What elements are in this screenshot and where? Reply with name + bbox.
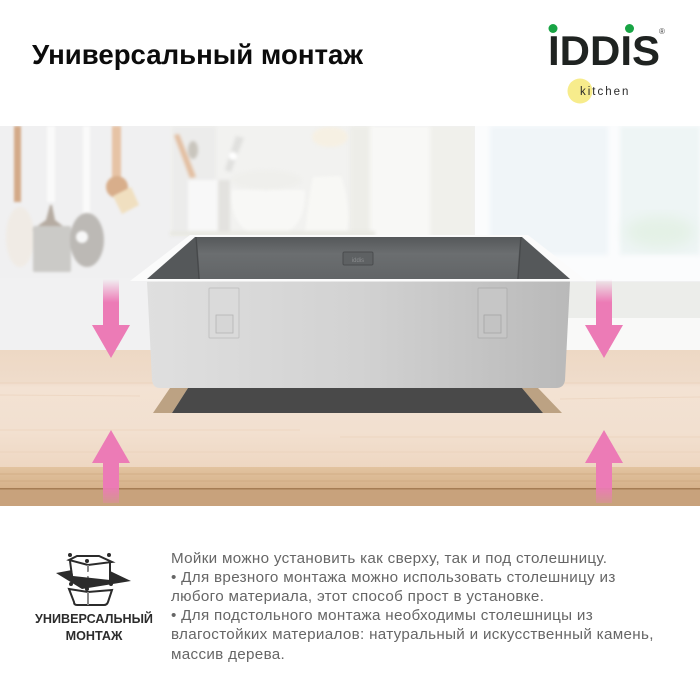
blurred crockery on shelf (170, 126, 375, 236)
sink rim flange (130, 235, 587, 281)
arrow: bottom left pointing up (92, 430, 130, 503)
icon caption: УНИВЕРСАЛЬНЫЙ (35, 612, 153, 626)
description text: любого материала, этот способ прост в установке. (171, 588, 544, 605)
description text: массив дерева. (171, 646, 285, 663)
drain overflow plate (343, 252, 373, 265)
icon: universal mounting (56, 553, 131, 606)
logo wordmark: IDDIS (548, 27, 660, 74)
countertop slab (56, 570, 131, 589)
logo: IDDIS kitchen (548, 24, 665, 104)
description text: • Для врезного монтажа можно использовать столешницу из (171, 569, 616, 586)
photo: sink mounted in countertop (0, 126, 700, 506)
mounting clip left (209, 288, 239, 338)
arrow: top left pointing down (92, 279, 130, 358)
logo wordmark: ® (659, 27, 665, 36)
countertop (0, 350, 700, 506)
arrow: top right pointing down (585, 279, 623, 358)
upper sink (69, 556, 112, 584)
logo mark: yellow circle (568, 78, 592, 104)
title: Универсальный монтаж (32, 39, 363, 70)
countertop cut-out (153, 388, 562, 413)
hanging utensils (6, 126, 139, 272)
description text: • Для подстольного монтажа необходимы столешницы из (171, 607, 593, 624)
description text: влагостойких материалов: натуральный и искусственный камень, (171, 626, 654, 643)
arrow: bottom right pointing up (585, 430, 623, 503)
icon caption (35, 611, 153, 642)
mounting clip right (478, 288, 507, 338)
sink interior (147, 237, 570, 279)
description text (171, 550, 654, 663)
sink (130, 235, 587, 388)
kitchen background (0, 126, 700, 350)
icon caption: МОНТАЖ (66, 628, 122, 642)
drain overflow plate: iddis (352, 258, 364, 264)
sink outer body (147, 281, 570, 388)
lower sink (69, 589, 112, 605)
mounting pins (68, 553, 113, 591)
description text: Мойки можно установить как сверху, так и под столешницу. (171, 550, 607, 566)
logo subtitle: kitchen (580, 86, 630, 98)
